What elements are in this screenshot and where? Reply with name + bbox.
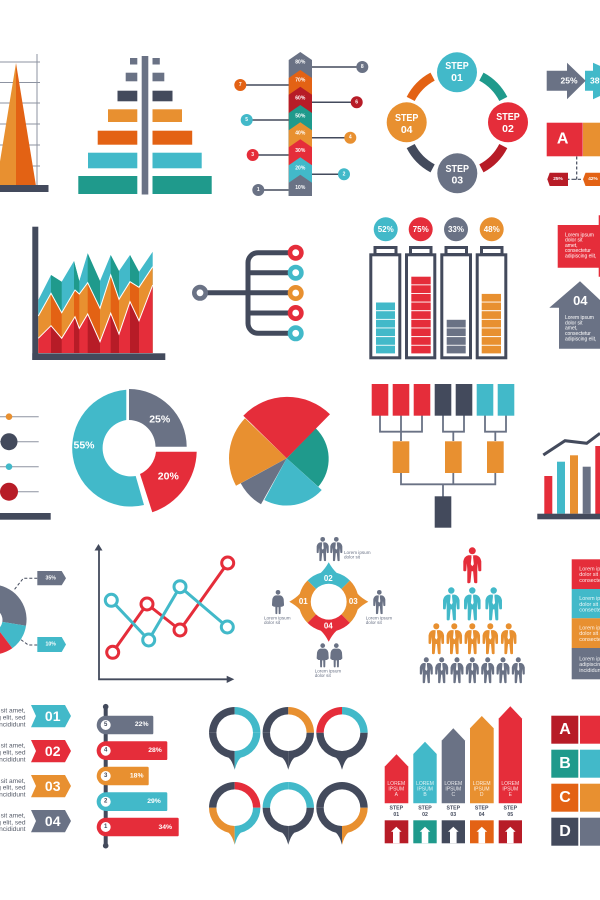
panel: percent column with pins: 1: [257, 187, 260, 193]
panel: percent column with pins: 2: [343, 171, 346, 177]
panel: percent column with pins: 10%: [295, 185, 306, 191]
panel: population pyramid: [78, 56, 212, 194]
panel: bar and line chart: [537, 433, 600, 519]
panel: house callout 04: adipiscing elit,: [565, 336, 596, 342]
panel: timeline bars: [97, 704, 179, 848]
panel: percent column with pins: 60%: [295, 96, 306, 102]
panel: rising arrow columns: LOREM: [444, 781, 462, 787]
panel: battery levels: 52%: [378, 225, 394, 234]
panel: percent column with pins: 40%: [295, 130, 306, 136]
panel: arrows and A block: [547, 63, 600, 186]
panel: rising arrow columns: 05: [507, 812, 513, 818]
panel: rose pie chart: [229, 397, 330, 506]
panel: arrows and A block: 25%: [560, 76, 578, 86]
panel: A B C D blocks: D: [559, 823, 571, 840]
panel: stacked area chart: [32, 227, 165, 360]
panel: rising arrow columns: E: [509, 792, 513, 798]
panel: branching connector: [194, 247, 301, 339]
panel: exploded donut chart: [72, 389, 197, 512]
panel: exploded donut chart: 25%: [149, 413, 171, 425]
panel: cone chart: [0, 54, 48, 192]
panel: exploded donut chart: 20%: [158, 471, 179, 483]
panel: numbered chevron list: 04: [45, 813, 61, 829]
panel: house callout 04: Lorem ipsum: [565, 315, 594, 321]
panel: rising arrow columns: A: [395, 792, 399, 798]
panel: house callout 04: consectetur: [565, 331, 591, 337]
panel: house callout 04: [549, 281, 600, 349]
panel: compass ring with people: dolor sit: [315, 673, 332, 678]
panel: A B C D blocks: [551, 716, 600, 846]
panel: timeline bars: 28%: [148, 747, 162, 754]
panel: rising arrow columns: 04: [479, 812, 485, 818]
panel: timeline bars: 22%: [135, 721, 149, 728]
panel: timeline bars: 18%: [130, 772, 144, 780]
panel: percent column with pins: 70%: [295, 78, 306, 84]
panel: rising arrow columns: B: [423, 792, 427, 798]
panel: tree diagram: [372, 384, 514, 528]
panel: timeline bars: 34%: [158, 824, 172, 831]
panel: donut with tags: 10%: [46, 641, 56, 647]
panel: numbered chevron list: 02: [45, 743, 61, 759]
panel: step cycle: [387, 52, 528, 193]
panel: rising arrow columns: LOREM: [501, 781, 519, 787]
panel: red callout arrow: amet,: [565, 243, 578, 249]
panel: rising arrow columns: [385, 706, 522, 843]
panel: rising arrow columns: 01: [393, 812, 399, 818]
panel: step cycle: 04: [401, 124, 413, 136]
panel: arrows and A block: 42%: [588, 176, 599, 182]
panel: rising arrow columns: C: [451, 792, 455, 798]
panel: compass ring with people: Lorem ipsum: [315, 669, 341, 674]
panel: rising arrow columns: STEP: [504, 806, 518, 812]
panel: rising arrow columns: LOREM: [387, 781, 405, 787]
panel: rising arrow columns: STEP: [447, 806, 461, 812]
panel: rising arrow columns: IPSUM: [474, 786, 490, 792]
panel: timeline bars: 1: [104, 824, 108, 830]
panel: step cycle: 02: [502, 123, 514, 135]
panel: rising arrow columns: IPSUM: [417, 786, 433, 792]
panel: stacked text blocks: [572, 559, 600, 679]
panel: percent column with pins: 7: [239, 82, 242, 88]
panel: rising arrow columns: LOREM: [473, 781, 491, 787]
panel: arrows and A block: 25%: [553, 176, 564, 182]
panel: rising arrow columns: IPSUM: [445, 786, 461, 792]
panel: rising arrow columns: 02: [422, 812, 428, 818]
panel: timeline bars: 3: [104, 773, 108, 779]
panel: timeline bars: 4: [104, 748, 108, 754]
panel: donut with tags: 35%: [46, 575, 56, 581]
panel: arrows and A block: A: [557, 130, 569, 148]
panel: compass ring with people: Lorem ipsum: [344, 550, 371, 555]
panel: rising arrow columns: STEP: [418, 806, 432, 812]
panel: red callout arrow: Lorem ipsum: [565, 232, 594, 238]
panel: rising arrow columns: IPSUM: [502, 786, 518, 792]
panel: exploded donut chart: 55%: [73, 440, 95, 452]
panel: percent column with pins: 5: [245, 117, 248, 123]
panel: step cycle: 01: [451, 72, 463, 84]
panel: step cycle: STEP: [446, 163, 469, 175]
panel: percent column with pins: 20%: [295, 166, 306, 172]
panel: compass ring with people: [264, 537, 392, 678]
panel: timeline bars: 2: [104, 799, 108, 805]
panel: rising arrow columns: D: [480, 792, 484, 798]
panel: compass ring with people: dolor sit: [264, 620, 281, 625]
panel: line chart: [94, 544, 234, 683]
panel: red callout arrow: consectetur: [565, 248, 591, 254]
panel: red callout arrow: dolor sit: [565, 238, 583, 244]
panel: step cycle: STEP: [496, 111, 520, 123]
panel: A B C D blocks: B: [559, 755, 571, 772]
panel: numbered chevron list: [0, 705, 71, 833]
panel: red callout arrow: adipiscing elit,: [565, 254, 596, 260]
panel: timeline bars: 29%: [147, 798, 161, 805]
panel: A B C D blocks: C: [559, 789, 571, 806]
panel: house callout 04: amet,: [565, 326, 578, 332]
panel: A B C D blocks: A: [559, 721, 571, 738]
panel: percent column with pins: 4: [349, 135, 352, 141]
panel: battery levels: [371, 217, 506, 358]
panel: numbered chevron list: 03: [45, 778, 61, 794]
panel: rising arrow columns: STEP: [390, 806, 404, 812]
panel: compass ring with people: Lorem ipsum: [264, 616, 291, 621]
panel: step cycle: STEP: [395, 112, 418, 124]
panel: map pin rings: [209, 707, 368, 845]
panel: house callout 04: 04: [573, 293, 588, 308]
panel: battery levels: 33%: [448, 225, 464, 234]
panel: house callout 04: dolor sit: [565, 320, 583, 326]
panel: people pyramid: [420, 547, 525, 683]
panel: percent column with pins: 50%: [295, 114, 306, 120]
panel: step cycle: 03: [451, 174, 463, 186]
panel: percent column with pins: 8: [361, 64, 364, 70]
panel: donut with tags: [0, 571, 66, 655]
panel: percent column with pins: [234, 52, 368, 196]
panel: rising arrow columns: 03: [450, 812, 456, 818]
panel: timeline bars: 5: [104, 722, 108, 728]
panel: battery levels: 75%: [413, 225, 429, 234]
panel: compass ring with people: Lorem ipsum: [366, 616, 392, 621]
panel: red callout arrow: [558, 215, 600, 277]
panel: compass ring with people: dolor sit: [366, 620, 383, 625]
panel: numbered chevron list: 01: [45, 708, 61, 724]
panel: rising arrow columns: LOREM: [416, 781, 434, 787]
panel: rising arrow columns: STEP: [475, 806, 489, 812]
panel: percent column with pins: 6: [355, 99, 358, 105]
panel: percent column with pins: 80%: [295, 60, 306, 66]
panel: slider dots: [0, 413, 51, 520]
panel: compass ring with people: 04: [324, 622, 333, 630]
panel: compass ring with people: dolor sit: [344, 554, 361, 559]
panel: step cycle: STEP: [445, 60, 469, 72]
panel: battery levels: 48%: [484, 225, 500, 234]
panel: percent column with pins: 30%: [295, 148, 306, 154]
panel: compass ring with people: 01: [299, 597, 308, 606]
panel: rising arrow columns: IPSUM: [388, 786, 404, 792]
panel: compass ring with people: 02: [324, 574, 333, 583]
panel: compass ring with people: 03: [349, 597, 358, 606]
panel: percent column with pins: 3: [251, 152, 254, 158]
